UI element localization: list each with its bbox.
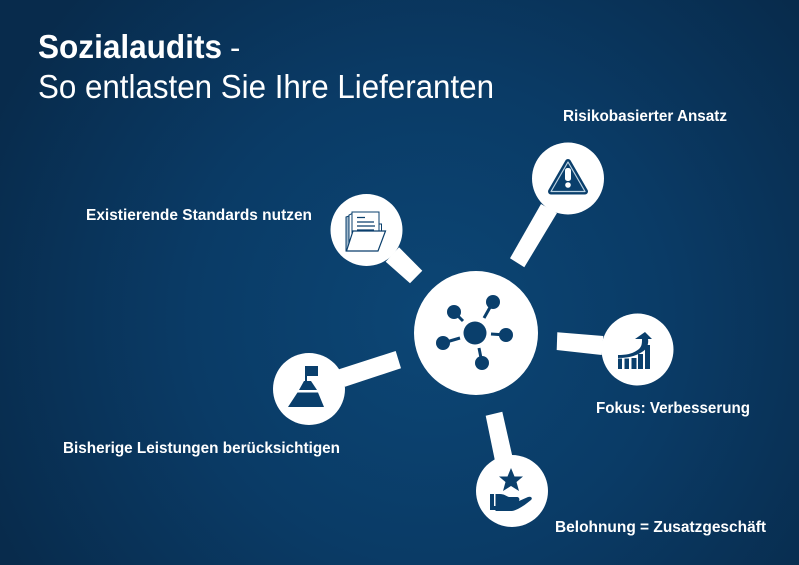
- label: Belohnung: Belohnung = Zusatzgeschäft: [555, 519, 767, 536]
- node: Bisherige Leistungen: [273, 351, 401, 425]
- title: -: [230, 30, 240, 65]
- central hub: [414, 271, 538, 395]
- label: Fokus Verbesserung: Fokus: Verbesserung: [596, 400, 750, 417]
- icon: hand with star: [490, 468, 532, 511]
- icon: folder: [346, 212, 386, 251]
- title: [38, 28, 494, 105]
- node: Belohnung: [476, 412, 548, 527]
- icon: warning triangle: [551, 162, 585, 192]
- icon: flag on mountain: [288, 366, 324, 407]
- node: Risikobasierter Ansatz: [510, 142, 604, 267]
- title: So entlasten Sie Ihre Lieferanten: [38, 68, 494, 105]
- label: Risikobasierter Ansatz: Risikobasierter Ansatz: [563, 108, 727, 125]
- icon: growth chart: [618, 332, 652, 369]
- label: Existierende Standards nutzen: Existierende Standards nutzen: [86, 207, 312, 224]
- node: Existierende Standards nutzen: [330, 194, 422, 283]
- title: Sozialaudits: [38, 28, 222, 65]
- icon: network: [436, 295, 513, 370]
- node: Fokus Verbesserung: [557, 314, 674, 386]
- label: Bisherige Leistungen: Bisherige Leistungen berücksichtigen: [63, 440, 340, 457]
